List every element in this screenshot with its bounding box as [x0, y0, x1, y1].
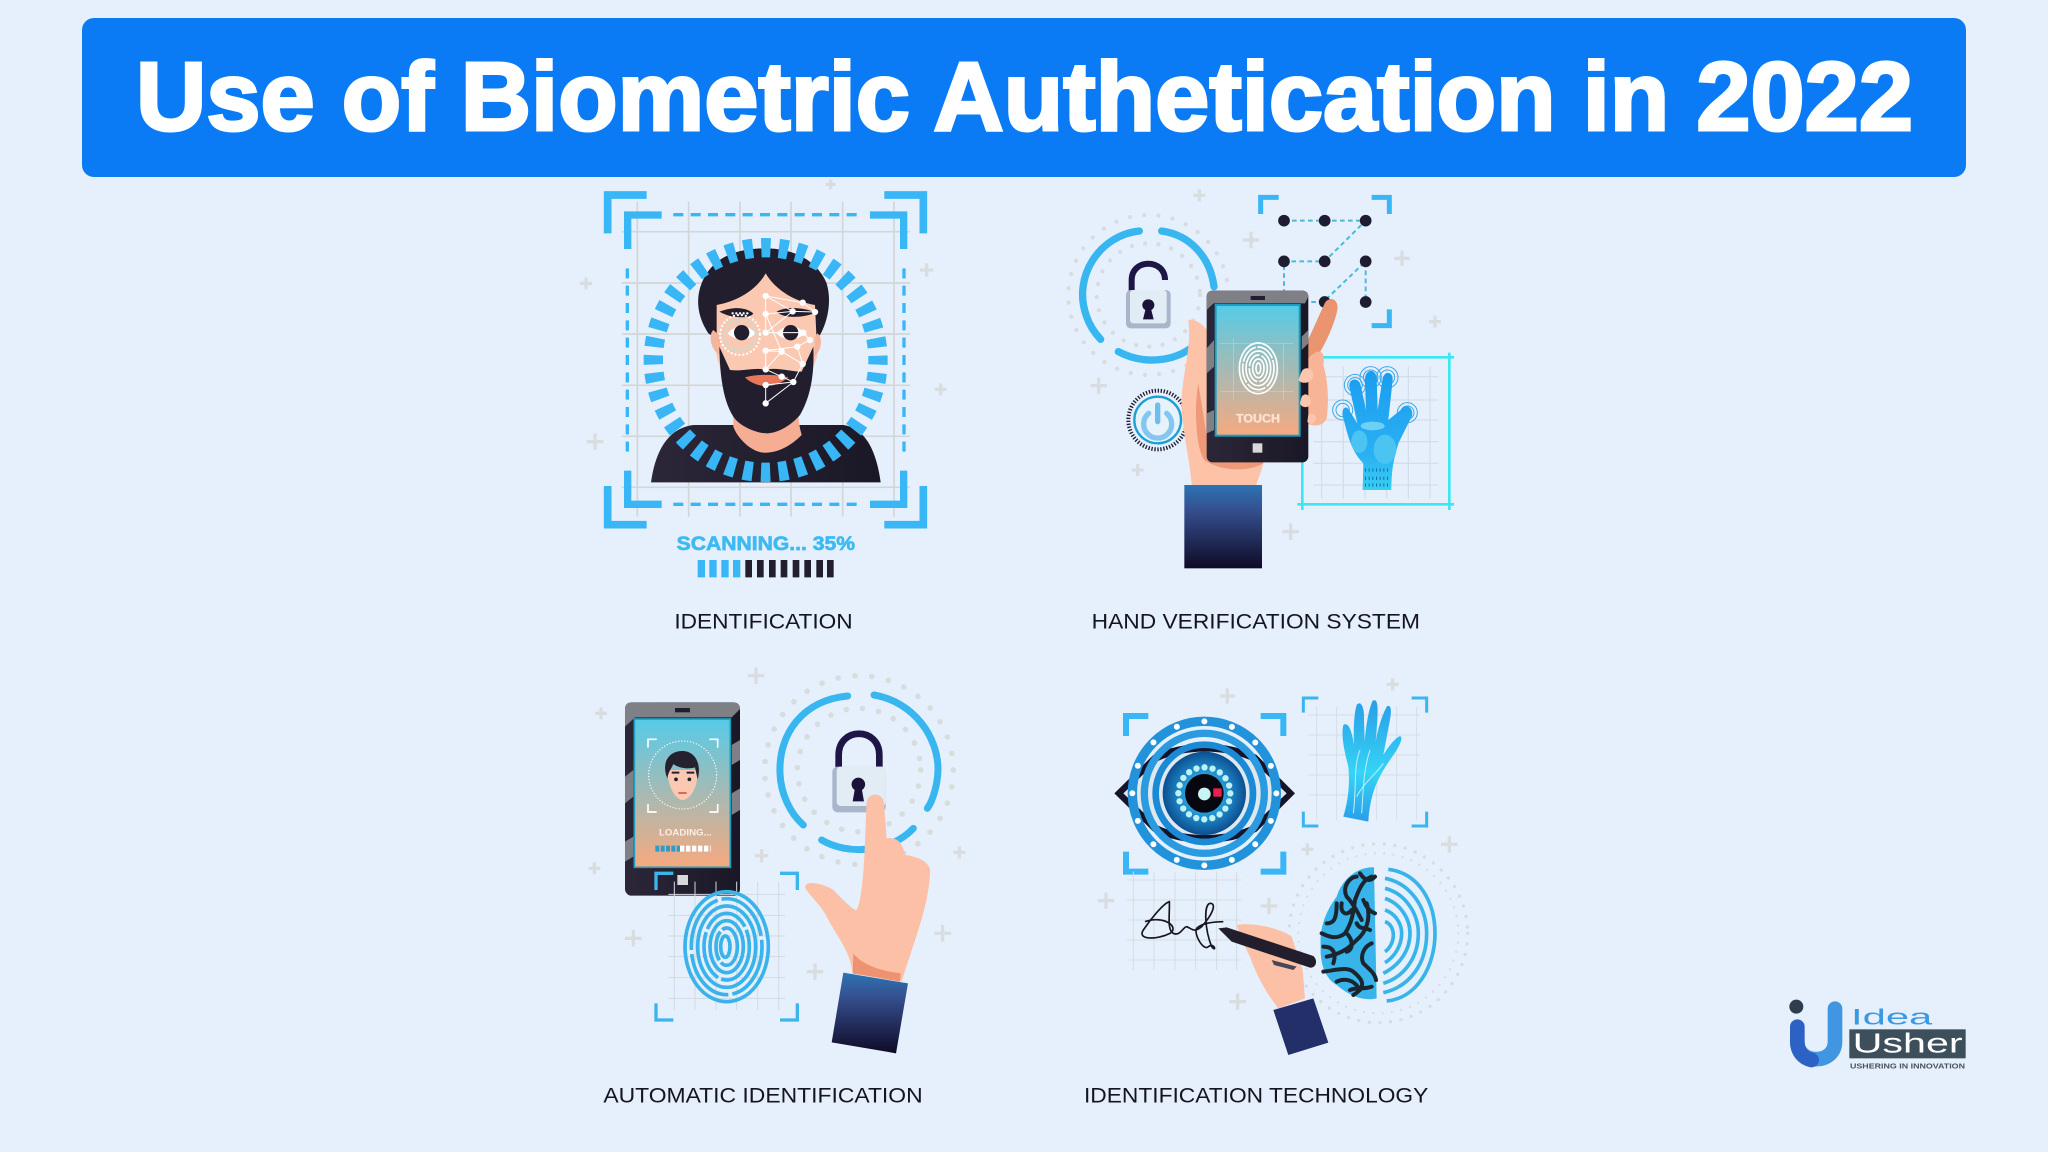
scan frame	[608, 195, 923, 525]
sleeve	[1273, 998, 1328, 1055]
iris scanner	[1114, 716, 1295, 872]
label: IDENTIFICATION TECHNOLOGY	[1084, 1083, 1428, 1107]
lock with ring	[765, 676, 953, 864]
hand shadow	[853, 953, 901, 982]
panel: automatic identification	[588, 667, 965, 1107]
phone with face scan: LOADING...	[659, 828, 712, 838]
unlock pattern	[1261, 197, 1389, 326]
panel: identification technology	[1084, 678, 1468, 1107]
logo word: Usher	[1849, 1027, 1966, 1058]
fingerprint scanner	[656, 873, 797, 1020]
logo word: Idea: Idea	[1851, 1004, 1934, 1029]
face mesh	[766, 296, 815, 403]
title banner	[82, 18, 1966, 177]
phone with face scan	[625, 702, 740, 896]
label: HAND VERIFICATION SYSTEM	[1092, 609, 1420, 633]
scanned hand	[1297, 353, 1454, 510]
hand scan	[1303, 698, 1427, 826]
panel: identification	[580, 179, 947, 633]
panel: hand verification system	[1068, 189, 1454, 633]
scanning ring	[653, 248, 878, 472]
pointing hand	[805, 795, 930, 982]
label: AUTOMATIC IDENTIFICATION	[603, 1083, 923, 1107]
title: Use of Biometric Authetication in 2022	[136, 42, 1913, 151]
scanned face	[665, 751, 699, 800]
phone: TOUCH	[1236, 412, 1280, 426]
writing hand with pen	[1218, 924, 1316, 1008]
scanning readout: SCANNING... 35%	[677, 534, 855, 555]
label: IDENTIFICATION	[674, 609, 853, 633]
progress bar	[701, 560, 830, 577]
lock with ring	[1068, 215, 1228, 375]
fingerprint	[1239, 343, 1277, 394]
portrait	[651, 248, 881, 482]
hand holding phone	[1181, 299, 1338, 485]
logo word: Usher: Usher	[1853, 1027, 1963, 1058]
power button	[1128, 391, 1187, 449]
sleeve	[832, 973, 908, 1053]
brain and fingerprint	[1289, 844, 1468, 1023]
sleeve	[1184, 485, 1262, 568]
logo tagline: USHERING IN INNOVATION	[1850, 1063, 1965, 1070]
phone	[1207, 291, 1308, 462]
fingers over phone	[1298, 368, 1316, 424]
signature	[1127, 872, 1242, 970]
logo: Idea Usher	[1789, 1000, 1966, 1070]
